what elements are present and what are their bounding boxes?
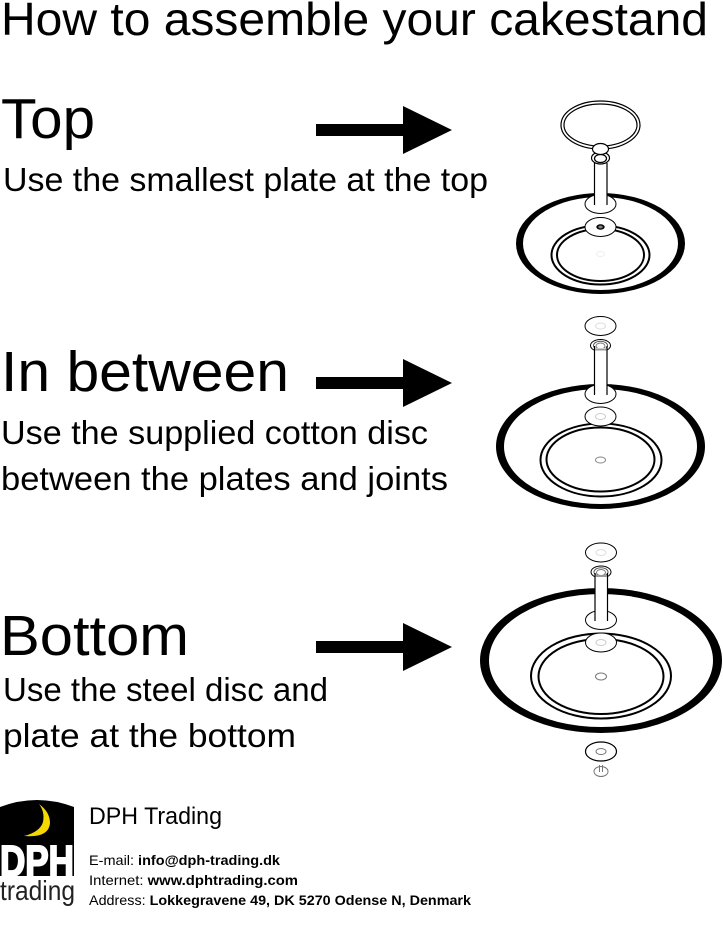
screw xyxy=(594,765,608,776)
logo background xyxy=(0,800,74,876)
inner plate rings xyxy=(552,226,650,284)
steel disc xyxy=(586,742,616,761)
top disc xyxy=(586,543,616,562)
top disc xyxy=(585,316,616,336)
contact: address: Address: Lokkegravene 49, DK 5270 Odense N, Denmark xyxy=(89,892,471,908)
lower joint disc xyxy=(586,610,616,630)
company name: DPH Trading xyxy=(89,803,222,830)
threaded collar xyxy=(591,566,611,578)
inner plate rings xyxy=(540,424,662,496)
outer plate xyxy=(496,384,705,509)
icon: crescent moon xyxy=(24,804,50,836)
column xyxy=(594,163,607,205)
arrow: top xyxy=(316,106,452,154)
logo word: trading xyxy=(0,875,75,906)
arrow: in between xyxy=(316,359,452,407)
text: top instruction: Use the smallest plate at the top xyxy=(3,161,488,198)
logo letters: DPH xyxy=(0,837,74,886)
collar xyxy=(592,152,610,164)
diagram: middle tier xyxy=(496,316,705,509)
text: bottom instruction: Use the steel disc and xyxy=(3,671,328,708)
lower joint disc xyxy=(585,194,616,214)
logo: DPH trading xyxy=(0,800,75,906)
cotton disc xyxy=(585,407,616,426)
text: bottom instruction line 2: plate at the bottom xyxy=(3,717,296,754)
top ring plate xyxy=(561,101,640,149)
heading: top: Top xyxy=(1,87,95,151)
lower joint disc xyxy=(585,384,616,404)
section: in between xyxy=(1,316,705,509)
diagram: bottom tier xyxy=(480,543,722,776)
diagram: top tier xyxy=(516,101,685,294)
column xyxy=(594,346,607,395)
threaded collar xyxy=(590,340,610,352)
contact: internet: Internet: www.dphtrading.com xyxy=(89,872,298,888)
text: in between instruction: Use the supplied cotton disc xyxy=(1,414,428,451)
cotton disc with slot xyxy=(585,218,616,236)
heading: in between: In between xyxy=(1,340,289,404)
outer plate xyxy=(480,588,722,733)
text: in between instruction line 2: between the plates and joints xyxy=(1,460,448,497)
knob xyxy=(592,144,608,154)
centre hole xyxy=(596,457,606,463)
contact: email: E-mail: info@dph-trading.dk xyxy=(89,852,280,868)
cotton disc xyxy=(586,633,616,652)
arrow: bottom xyxy=(316,623,452,671)
section: bottom xyxy=(0,543,722,776)
centre hole xyxy=(596,673,606,680)
centre mark xyxy=(596,252,604,256)
inner plate rings xyxy=(531,634,671,718)
heading: bottom: Bottom xyxy=(0,604,189,668)
outer plate xyxy=(516,193,685,294)
section: top xyxy=(1,87,685,294)
column xyxy=(595,573,608,621)
